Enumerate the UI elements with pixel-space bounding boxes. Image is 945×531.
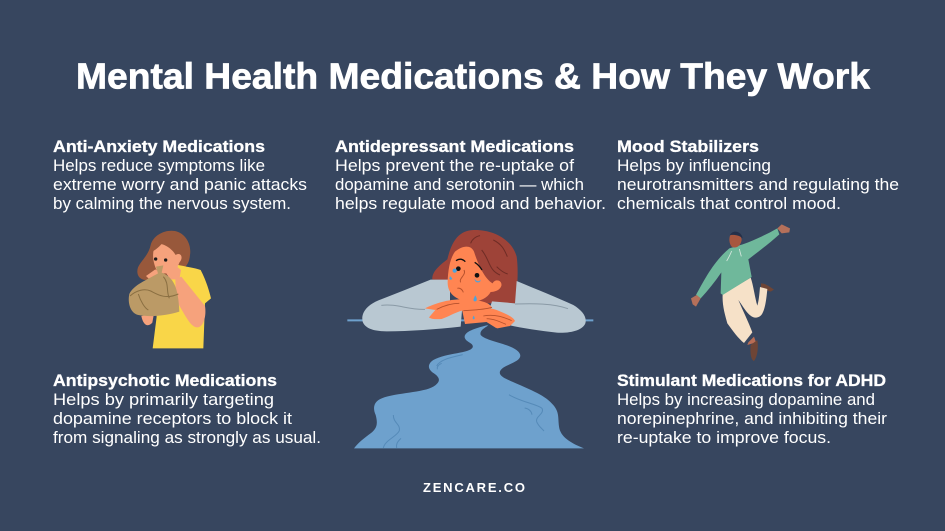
hands at mouth <box>146 265 181 282</box>
text block: antipsychotic medications <box>53 371 321 447</box>
text block: mood stabilizers <box>617 137 899 213</box>
title: Mental Health Medications & How They Work <box>76 56 871 96</box>
arm <box>175 277 205 327</box>
text block: anti-anxiety medications: by calming the nervous system. <box>53 194 291 213</box>
lower hand <box>691 295 701 307</box>
text block: stimulant medications for ADHD <box>617 371 887 447</box>
text block: mood stabilizers: neurotransmitters and regulating the <box>617 175 899 194</box>
hands <box>425 299 492 319</box>
text block: antidepressant medications: Helps prevent the re-uptake of <box>335 156 574 175</box>
text block: antidepressant medications <box>335 137 606 213</box>
illustration: woman breathing into paper bag <box>129 231 211 348</box>
front ankle <box>747 337 756 345</box>
text block: antidepressant medications: Antidepressant Medications <box>335 137 574 156</box>
brand footer: ZENCARE.CO <box>423 480 525 495</box>
hair <box>730 232 743 238</box>
sweater <box>696 228 779 298</box>
hair fringe <box>152 241 163 252</box>
back shoe <box>761 283 774 292</box>
text block: mood stabilizers: Mood Stabilizers <box>617 137 759 156</box>
text block: anti-anxiety medications: extreme worry and panic attacks <box>53 175 307 194</box>
bag creases <box>130 277 178 310</box>
pants <box>723 278 767 343</box>
text block: mood stabilizers: chemicals that control mood. <box>617 194 841 213</box>
front shoe <box>750 340 758 361</box>
text block: antidepressant medications: helps regulate mood and behavior. <box>335 194 606 213</box>
illustration: crying woman and pool of tears <box>347 230 593 448</box>
text block: stimulant medications for ADHD: re-uptake to improve focus. <box>617 428 831 447</box>
hair <box>432 230 518 303</box>
hair <box>137 231 190 280</box>
right sleeve <box>490 281 586 333</box>
illustration: man jumping joyfully <box>691 224 790 361</box>
sleeve creases <box>381 305 425 309</box>
eyes <box>154 257 157 261</box>
hair strands <box>471 236 508 275</box>
tears <box>449 269 481 319</box>
table line <box>347 317 593 323</box>
text block: antipsychotic medications: from signaling as strongly as usual. <box>53 428 321 447</box>
text block: stimulant medications for ADHD: Stimulant Medications for ADHD <box>617 371 886 390</box>
left sleeve <box>362 280 462 331</box>
text block: stimulant medications for ADHD: norepinephrine, and inhibiting their <box>617 409 887 428</box>
far hand under bag <box>141 313 154 325</box>
text block: anti-anxiety medications <box>53 137 307 213</box>
text block: antipsychotic medications: dopamine receptors to block it <box>53 409 292 428</box>
shirt <box>153 264 211 348</box>
text block: mood stabilizers: Helps by influencing <box>617 156 771 175</box>
hood strings <box>727 249 741 261</box>
text block: anti-anxiety medications: Helps reduce symptoms like <box>53 156 265 175</box>
river ripples <box>383 355 544 448</box>
head <box>729 234 742 248</box>
text block: antipsychotic medications: Helps by primarily targeting <box>53 390 274 409</box>
river of tears <box>354 325 584 448</box>
text block: antidepressant medications: dopamine and serotonin — which <box>335 175 584 194</box>
raised hand <box>777 224 790 233</box>
face <box>153 244 182 273</box>
paper bag <box>129 265 179 316</box>
text block: antipsychotic medications: Antipsychotic Medications <box>53 371 277 390</box>
face <box>448 247 501 302</box>
text block: stimulant medications for ADHD: Helps by increasing dopamine and <box>617 390 875 409</box>
finger lines <box>437 303 512 324</box>
text block: anti-anxiety medications: Anti-Anxiety Medications <box>53 137 265 156</box>
neck <box>462 309 497 328</box>
eyes and brows <box>456 266 461 271</box>
